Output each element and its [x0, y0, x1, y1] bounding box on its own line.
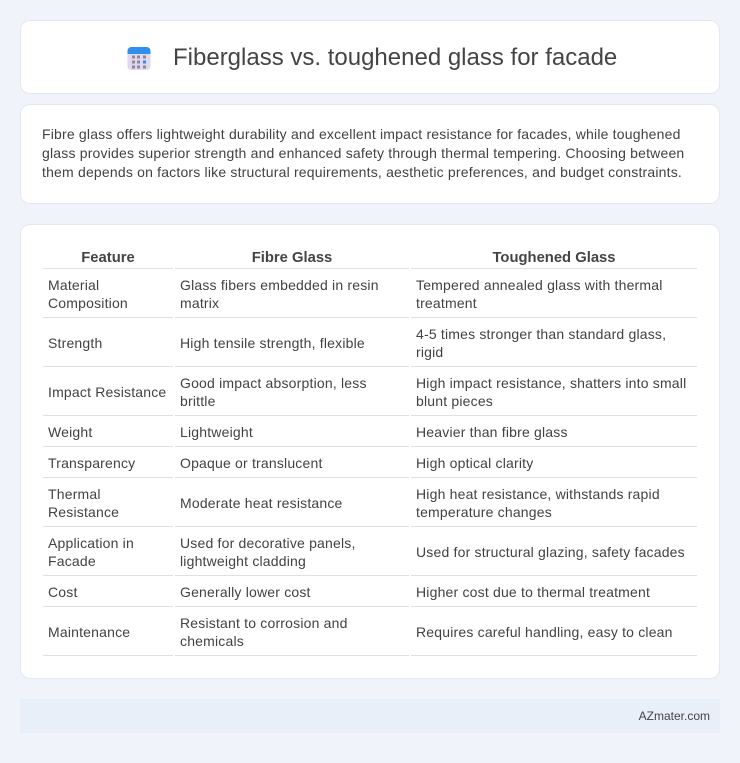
row: impact resistance [48, 375, 686, 409]
row: impact resistance: High impact resistance, shatters into small [416, 375, 686, 391]
row: impact resistance: Good impact absorption, less [180, 375, 367, 391]
row: maintenance: Maintenance [48, 624, 130, 640]
row: thermal resistance: Moderate heat resistance [180, 495, 343, 511]
footer bar [20, 699, 720, 733]
row: application in facade [48, 535, 685, 569]
summary text: glass provides superior strength and enhanced safety through thermal tempering. Choosing between [42, 145, 684, 161]
row: cost: Cost [48, 584, 78, 600]
row: strength: 4-5 times stronger than standard glass, [416, 326, 666, 342]
row: application in facade: Facade [48, 553, 96, 569]
row: weight: Lightweight [180, 424, 253, 440]
summary text [42, 126, 684, 180]
row: material composition [48, 277, 663, 311]
table header: Feature [81, 250, 135, 266]
row: thermal resistance [48, 486, 660, 520]
row: material composition: Glass fibers embedded in resin [180, 277, 379, 293]
icon: calendar [128, 47, 150, 70]
row: strength: High tensile strength, flexible [180, 335, 365, 351]
row: thermal resistance: temperature changes [416, 504, 552, 520]
summary text: Fibre glass offers lightweight durability and excellent impact resistance for facades, while toughened [42, 126, 681, 142]
panel: summary card [20, 104, 720, 204]
table header [81, 250, 616, 266]
row: transparency [48, 455, 534, 471]
row: material composition: Material [48, 277, 99, 293]
row: maintenance: chemicals [180, 633, 244, 649]
row: maintenance [48, 615, 673, 649]
row: strength [48, 326, 666, 360]
row: strength: rigid [416, 344, 443, 360]
row: strength: Strength [48, 335, 102, 351]
footer credit: AZmater.com [639, 709, 710, 723]
row: transparency: Opaque or translucent [180, 455, 323, 471]
row: material composition: matrix [180, 295, 219, 311]
row: thermal resistance: High heat resistance, withstands rapid [416, 486, 660, 502]
row: impact resistance: blunt pieces [416, 393, 493, 409]
panel: title card [20, 20, 720, 94]
panel: comparison table card [20, 224, 720, 679]
row: transparency: Transparency [48, 455, 135, 471]
row: application in facade: Used for structural glazing, safety facades [416, 544, 685, 560]
summary text: them depends on factors like structural requirements, aesthetic preferences, and budget constraints. [42, 164, 682, 180]
row: application in facade: lightweight cladding [180, 553, 306, 569]
row: material composition: treatment [416, 295, 477, 311]
row: impact resistance: brittle [180, 393, 216, 409]
row: material composition: Tempered annealed glass with thermal [416, 277, 663, 293]
row: weight: Weight [48, 424, 92, 440]
row: weight: Heavier than fibre glass [416, 424, 568, 440]
row: application in facade: Used for decorative panels, [180, 535, 356, 551]
row: material composition: Composition [48, 295, 128, 311]
row: thermal resistance: Thermal [48, 486, 101, 502]
row: weight [48, 424, 568, 440]
row: cost: Generally lower cost [180, 584, 311, 600]
row: maintenance: Resistant to corrosion and [180, 615, 348, 631]
row: cost: Higher cost due to thermal treatment [416, 584, 650, 600]
row: cost [48, 584, 650, 600]
row: thermal resistance: Resistance [48, 504, 119, 520]
comparison table [43, 250, 697, 656]
title: Fiberglass vs. toughened glass for facade [173, 44, 617, 71]
table header: Fibre Glass [252, 250, 332, 266]
row: maintenance: Requires careful handling, easy to clean [416, 624, 673, 640]
row: impact resistance: Impact Resistance [48, 384, 166, 400]
row: application in facade: Application in [48, 535, 134, 551]
row: transparency: High optical clarity [416, 455, 533, 471]
table header: Toughened Glass [492, 250, 616, 266]
